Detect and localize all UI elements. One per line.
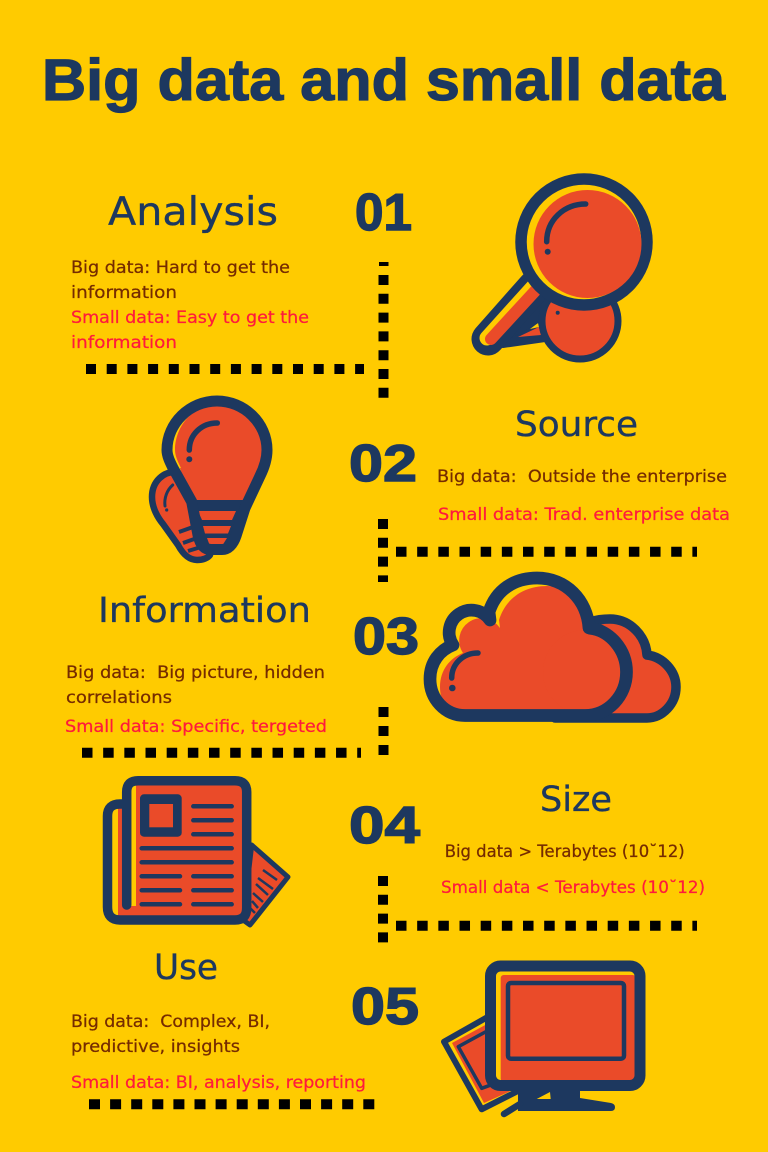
text: big data source: Big data: Outside the enterprise — [437, 466, 727, 486]
heading: use: Use — [154, 948, 218, 988]
number 03: 03 — [353, 608, 419, 666]
icon: light bulbs — [152, 401, 275, 560]
text: small data analysis: information — [71, 332, 177, 352]
text: small data analysis: Small data: Easy to get the — [71, 307, 309, 327]
text: big data information: Big data: Big picture, hidden — [66, 662, 325, 682]
text: big data analysis: Big data: Hard to get the — [71, 257, 290, 277]
icon: monitor — [444, 966, 640, 1114]
heading: size: Size — [540, 780, 612, 820]
panel: 01 analysis — [71, 179, 647, 359]
text: big data size: Big data > Terabytes (10˘12) — [445, 841, 685, 861]
text: small data size: Small data < Terabytes (10˘12) — [441, 877, 705, 897]
icon: magnifying glass — [487, 179, 647, 359]
text: big data analysis — [71, 257, 290, 302]
text: small data analysis — [71, 307, 309, 352]
panel: 05 use — [71, 948, 640, 1114]
icon: clouds — [430, 578, 676, 724]
text: small data information: Small data: Specific, tergeted — [65, 716, 327, 736]
icon: newspapers — [108, 781, 288, 925]
text: big data use — [71, 1011, 270, 1056]
text: small data use: Small data: BI, analysis, reporting — [71, 1072, 366, 1092]
panel: 02 source — [152, 401, 730, 560]
title: Big data and small data — [42, 48, 726, 113]
heading: analysis: Analysis — [108, 190, 278, 235]
text: small data source: Small data: Trad. enterprise data — [438, 504, 730, 524]
heading: source: Source — [515, 405, 638, 445]
text: big data information — [66, 662, 325, 707]
heading: information: Information — [98, 591, 311, 631]
text: big data information: correlations — [66, 687, 172, 707]
text: big data analysis: information — [71, 282, 177, 302]
panel: 03 information — [65, 578, 676, 736]
number 04: 04 — [349, 797, 420, 855]
number 05: 05 — [351, 978, 419, 1036]
text: big data use: Big data: Complex, BI, — [71, 1011, 270, 1031]
number 01: 01 — [355, 184, 412, 242]
panel: 04 size — [108, 780, 705, 925]
text: big data use: predictive, insights — [71, 1036, 240, 1056]
number 02: 02 — [349, 435, 417, 493]
